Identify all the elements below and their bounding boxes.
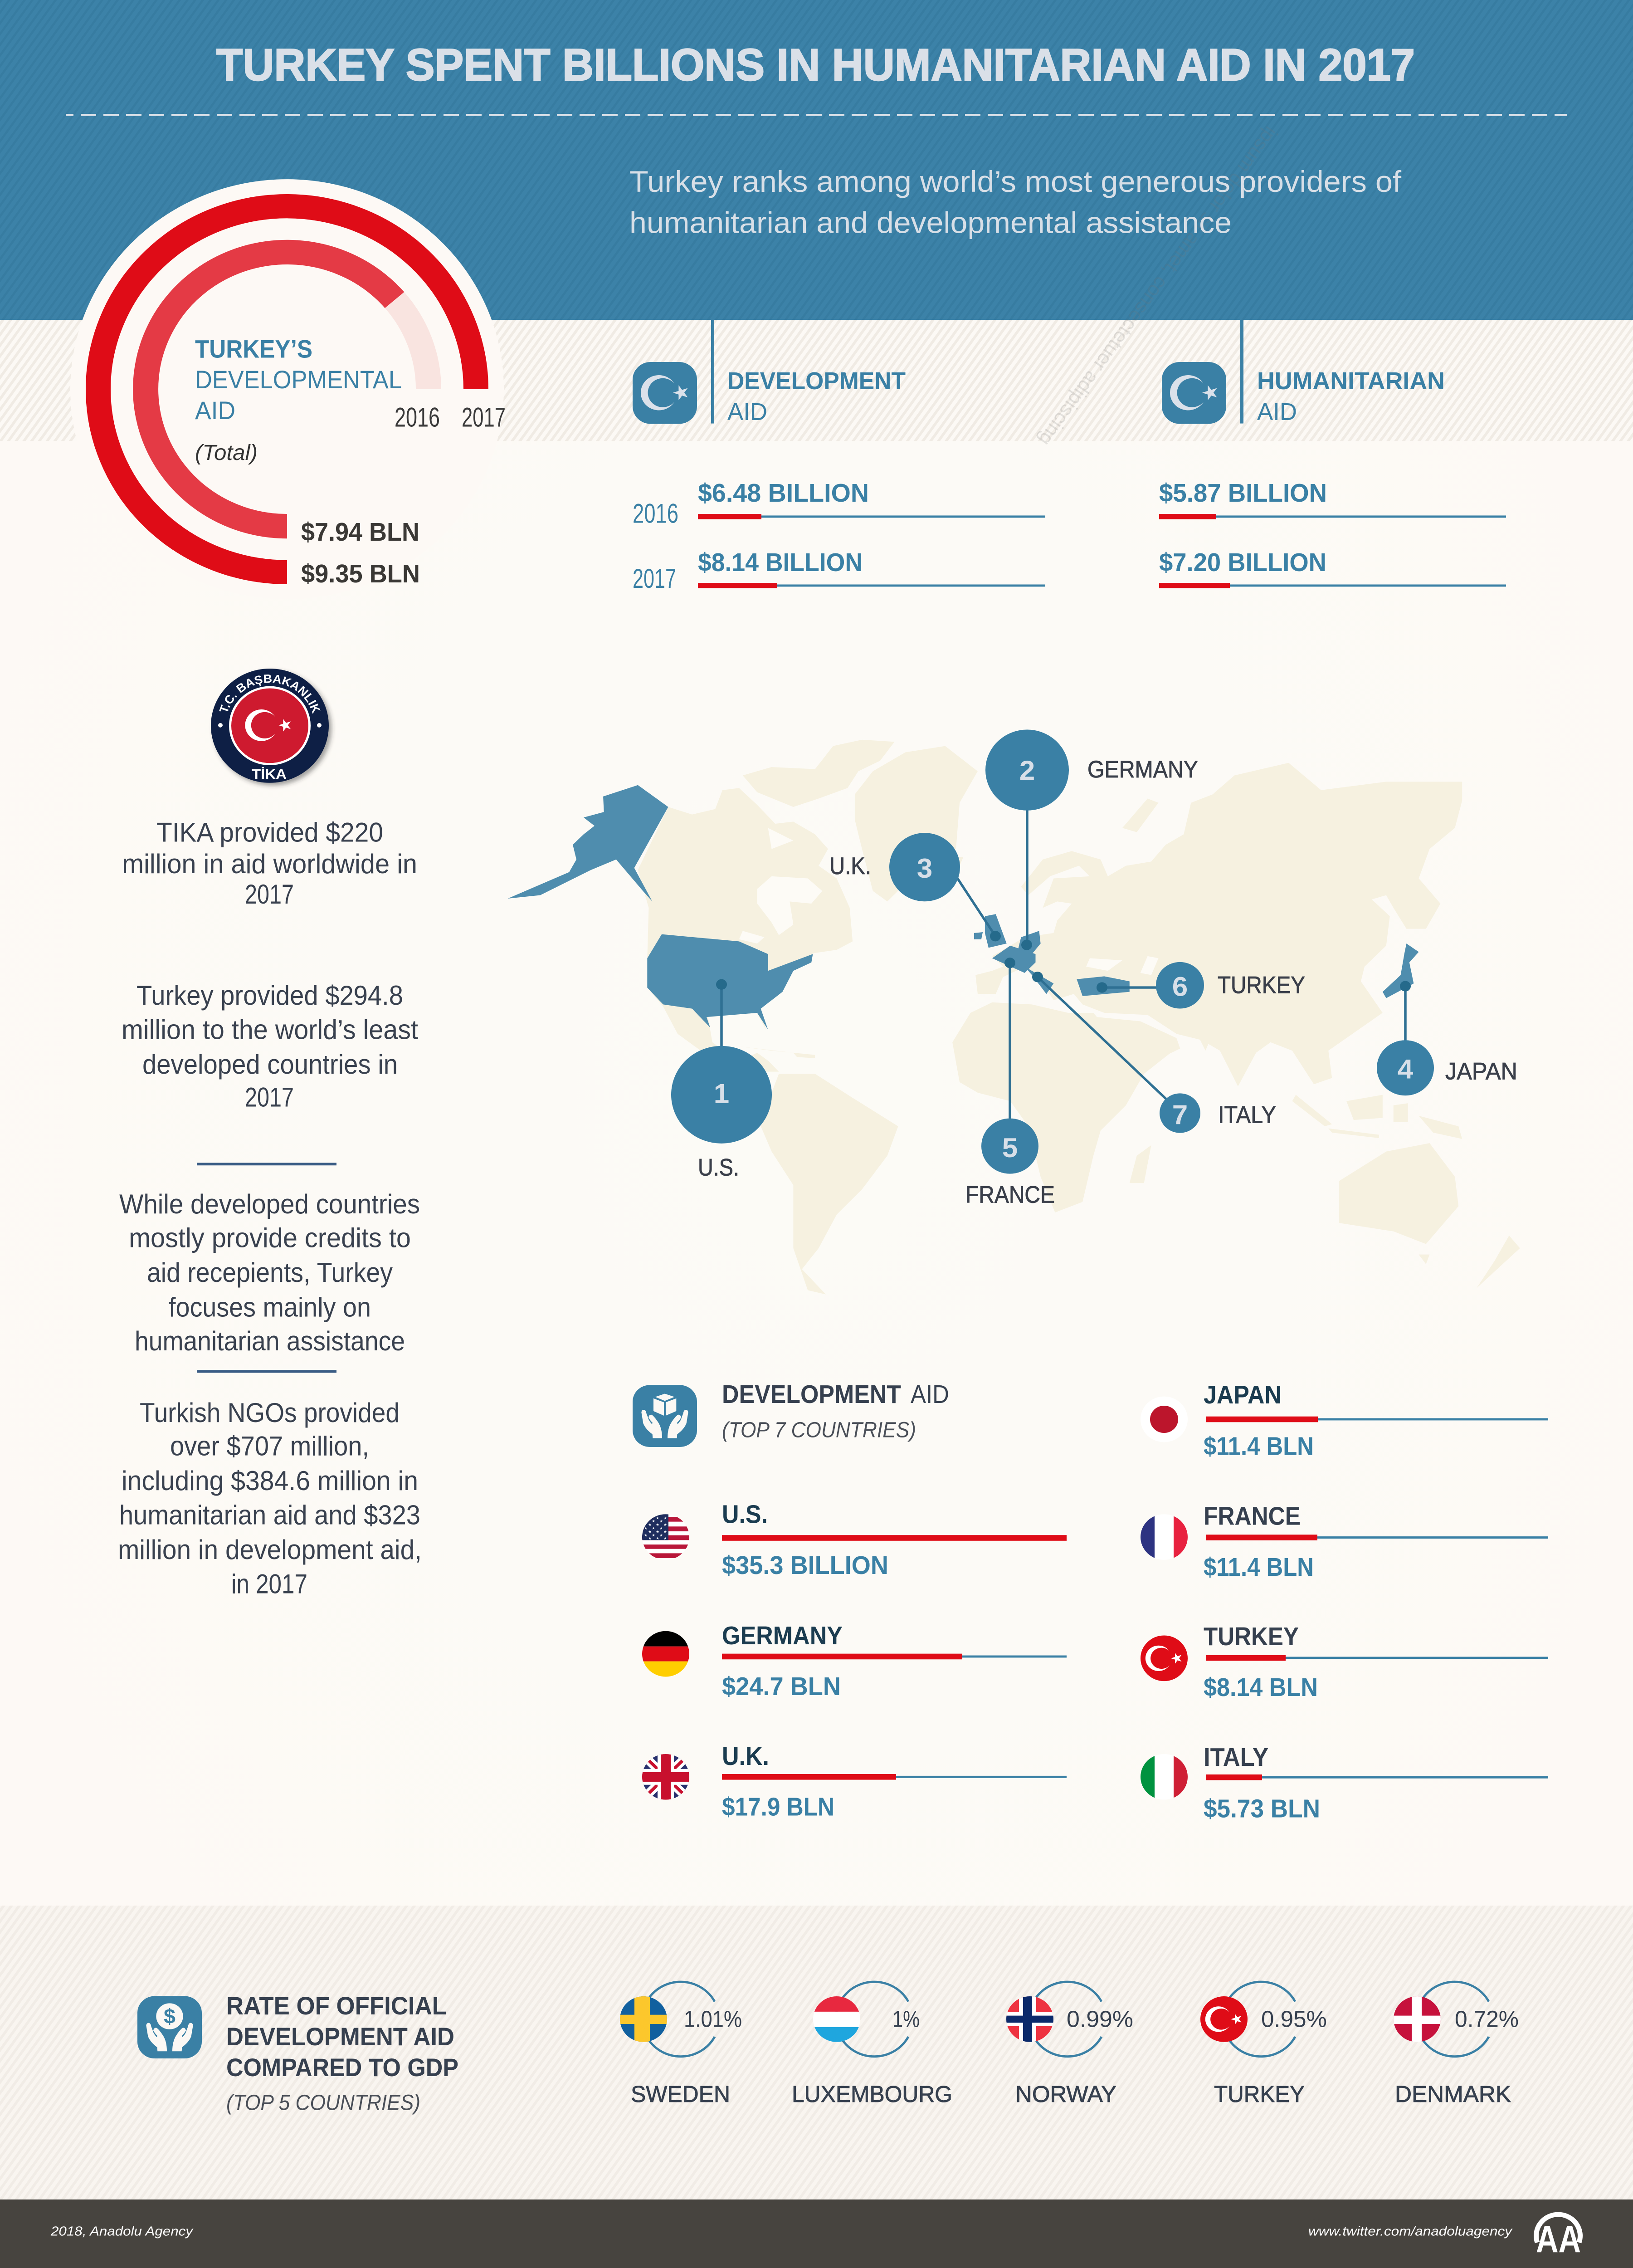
bar 2016: $6.48 BILLION [698,479,869,508]
year labels [633,498,678,594]
text block: NGOs: humanitarian aid and $323 [119,1500,420,1530]
row: France: $11.4 BLN [1204,1553,1314,1582]
map marker 2: Germany: GERMANY [1087,756,1198,783]
map connector lines [721,808,1405,1124]
icon: Italian flag [1141,1754,1188,1800]
row: France [1141,1502,1548,1582]
text block: credits: aid recepients, Turkey [147,1257,393,1288]
icon: Turkish flag [1141,1635,1188,1681]
item: Denmark: DENMARK [1395,2082,1511,2107]
map marker 6: Turkey: TURKEY [1218,972,1305,998]
text block: NGOs: over $707 million, [170,1431,369,1461]
row: Germany: GERMANY [722,1622,843,1650]
panel: humanitarian aid [1159,320,1506,588]
bar 2017 [698,548,1045,588]
row: Italy: $5.73 BLN [1204,1794,1320,1823]
bar 2016 [1159,479,1506,519]
map marker 6: Turkey [1156,962,1305,1009]
row: U.S.: $35.3 BILLION [722,1551,888,1580]
map marker 5: France [965,1119,1055,1208]
icon: hands holding box [633,1385,697,1447]
bar 2016 [698,479,1045,519]
map marker 7: Italy: 7 [1172,1100,1188,1130]
subheading: (TOP 7 COUNTRIES) [722,1418,916,1442]
gauge values: $7.94 BLN [301,518,419,547]
text block: least developed countries: developed countries in [142,1049,398,1080]
item: Sweden [620,1982,742,2107]
text block: NGOs: in 2017 [231,1569,307,1599]
bar 2016: $5.87 BILLION [1159,479,1327,508]
heading: DEVELOPMENT [722,1380,901,1409]
row: U.K.: $17.9 BLN [722,1793,834,1821]
row: Italy: ITALY [1204,1743,1268,1772]
gauge heading: TURKEY’S [195,335,312,363]
item: Norway: NORWAY [1015,2082,1116,2107]
gauge heading: AID [195,396,235,425]
gauge ring 2017 [98,206,476,572]
text block: credits: focuses mainly on [169,1292,371,1322]
row: Turkey: $8.14 BLN [1204,1673,1318,1702]
row: Germany: $24.7 BLN [722,1672,841,1701]
heading: AID [1257,398,1297,425]
panel: left column [118,669,422,1599]
credit: 2018, Anadolu Agency [50,2224,194,2239]
map marker 6: Turkey: 6 [1172,971,1188,1002]
map marker 2: Germany: 2 [1019,755,1035,786]
item: Denmark: 0.72% [1455,2006,1519,2032]
map marker 3: U.K.: U.K. [829,853,871,880]
year labels: 2016 [395,402,440,432]
map marker 4: Japan: 4 [1398,1054,1413,1084]
subtitle: humanitarian and developmental assistance [629,206,1232,240]
text block: TIKA [122,817,417,909]
year labels: 2016 [633,498,678,528]
item: Denmark [1394,1982,1519,2107]
world map [508,740,1520,1295]
icon: Luxembourg flag [813,1996,860,2042]
icon: turkish crescent [1162,362,1226,424]
icon: turkish crescent [633,362,697,424]
bar 2017: $8.14 BILLION [698,548,863,577]
map marker 4: Japan [1377,1040,1517,1095]
row: U.K.: U.K. [722,1742,769,1771]
item: Turkey: 0.95% [1261,2006,1327,2032]
gauge values: $9.35 BLN [301,560,420,588]
panel: top 7 development aid [633,1380,1548,1823]
row: U.K. [642,1747,1067,1817]
icon: TIKA logo [211,669,331,786]
row: U.S.: U.S. [722,1500,768,1529]
bar 2017: $7.20 BILLION [1159,548,1326,577]
row: Japan: $11.4 BLN [1204,1432,1314,1461]
heading [727,367,906,425]
gauge heading: DEVELOPMENTAL [195,366,402,394]
map marker 5: France: 5 [1002,1133,1018,1163]
icon: Norwegian flag [1006,1996,1053,2042]
item: Sweden: 1.01% [684,2006,742,2032]
map marker 3: U.K.: 3 [917,853,932,884]
icon: German flag [642,1631,689,1677]
watermark text: ipsum dolor sit amet, consectetuer adipiscing [1034,122,1282,450]
bar 2017 [1159,548,1506,588]
year labels [395,402,506,432]
gauge values [301,518,420,588]
title: TURKEY SPENT BILLIONS IN HUMANITARIAN AID IN 2017 [216,40,1415,90]
header band [0,0,1633,320]
text block: TIKA: million in aid worldwide in [122,849,417,879]
map marker 1: U.S.: 1 [714,1079,729,1109]
icon: Japanese flag [1141,1397,1188,1442]
text block: NGOs: Turkish NGOs provided [140,1398,400,1428]
item: Luxembourg: 1% [892,2006,920,2032]
text block: TIKA: 2017 [245,879,294,909]
heading: HUMANITARIAN [1257,367,1445,395]
heading [226,1992,458,2082]
subtitle: Turkey ranks among world’s most generous providers of [629,165,1401,199]
text block: least developed countries: Turkey provided $294.8 [136,980,403,1011]
icon: Swedish flag [620,1996,667,2042]
icon: TIKA logo: TİKA [252,766,287,782]
row: Japan: JAPAN [1204,1381,1282,1409]
icon: hands holding coin: $ [164,2004,175,2028]
icon: AA logo: AA [1536,2218,1581,2260]
map location dots [716,931,1411,993]
item: Turkey: TURKEY [1214,2082,1305,2107]
heading [1257,367,1445,425]
map marker 5: France: FRANCE [965,1181,1055,1208]
subheading: (TOP 5 COUNTRIES) [226,2090,420,2115]
row: U.S. [642,1505,1067,1576]
map marker 4: Japan: JAPAN [1445,1058,1517,1085]
text block: credits: While developed countries [119,1189,420,1219]
map marker 7: Italy [1160,1093,1276,1133]
item: Norway: 0.99% [1067,2006,1133,2032]
icon: US flag [642,1514,689,1560]
text block: NGOs: including $384.6 million in [122,1466,418,1496]
row: Turkey: TURKEY [1204,1623,1299,1651]
gauge ring 2016 [146,252,429,526]
item: Luxembourg [792,1982,952,2107]
year labels: 2017 [462,402,506,432]
heading: RATE OF OFFICIAL [226,1992,447,2020]
map marker 3: U.K. [829,833,960,901]
heading: DEVELOPMENT [727,367,906,395]
map marker 2: Germany [985,730,1198,811]
text block: credits: humanitarian assistance [135,1326,405,1356]
item: Turkey [1200,1982,1327,2107]
panel: developmental aid gauge [70,179,506,599]
text block: TIKA: TIKA provided $220 [156,817,383,847]
subtitle [629,165,1401,240]
heading: AID [727,398,767,425]
row: Italy [1141,1743,1548,1823]
icon: hands holding coin [137,1996,202,2058]
footer [0,2200,1633,2268]
row: Japan [1141,1381,1548,1461]
icon: Danish flag [1394,1996,1441,2042]
heading: AID [911,1380,949,1409]
year labels: 2017 [633,563,676,594]
map marker 1: U.S. [671,1046,772,1181]
heading: COMPARED TO GDP [226,2053,458,2082]
item: Norway [1006,1982,1133,2107]
text block: NGOs [118,1398,422,1599]
item: Luxembourg: LUXEMBOURG [792,2082,952,2107]
icon: Turkish flag [1200,1996,1248,2042]
text block: credits [119,1189,420,1356]
panel: development aid [633,320,1045,594]
item: Sweden: SWEDEN [631,2082,730,2107]
icon: French flag [1141,1514,1188,1560]
text block: least developed countries [122,980,418,1112]
text block: NGOs: million in development aid, [118,1535,422,1565]
gauge heading [195,335,402,425]
twitter link: www.twitter.com/anadoluagency [1308,2224,1513,2239]
row: France: FRANCE [1204,1502,1301,1530]
icon: TIKA logo: T.C. BAŞBAKANLIK [217,672,323,715]
row: Turkey [1141,1623,1548,1702]
map marker 7: Italy: ITALY [1218,1101,1276,1128]
text block: least developed countries: 2017 [245,1082,294,1112]
heading: DEVELOPMENT AID [226,2023,454,2051]
panel: aid rate compared to GDP [137,1982,1519,2115]
total note: (Total) [195,440,258,465]
striped band: upper [0,320,1633,441]
text block: credits: mostly provide credits to [129,1222,411,1253]
icon: UK flag [642,1754,689,1800]
map marker 1: U.S.: U.S. [698,1154,739,1181]
striped band: lower [0,1906,1633,2200]
row: Germany [642,1627,1067,1697]
text block: least developed countries: million to the world’s least [122,1014,418,1045]
